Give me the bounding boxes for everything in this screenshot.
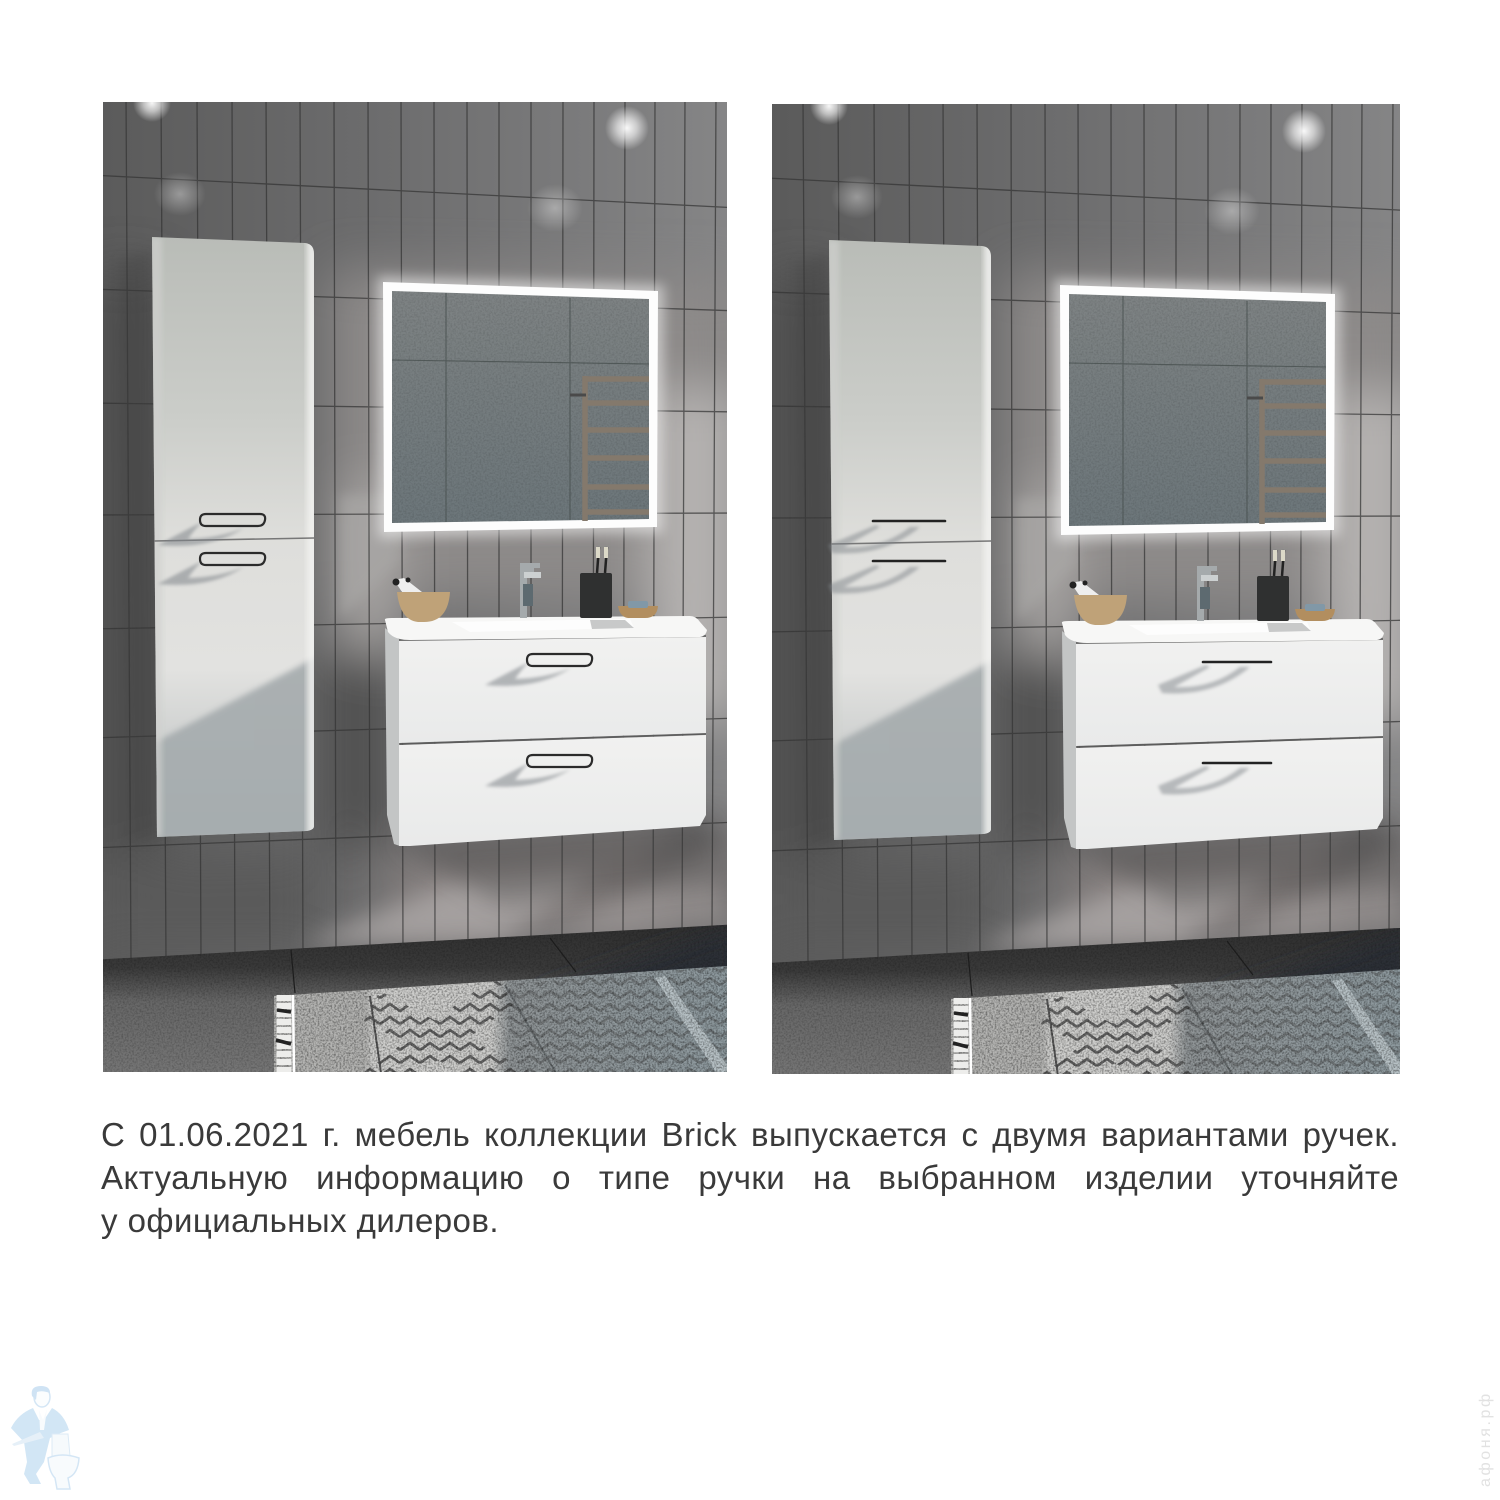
handle: cabinet upper bar [873, 520, 945, 522]
rug [274, 966, 740, 1085]
illuminated mirror [1054, 279, 1341, 541]
illuminated mirror [377, 276, 664, 538]
handle: cabinet lower loop [200, 553, 265, 565]
rug [951, 969, 1417, 1088]
handle: drawer lower loop [527, 755, 592, 767]
tiled wall [90, 84, 740, 1085]
panel: left photo, loop handles [90, 84, 740, 1085]
text block: note about handle variants: Актуальную информацию о типе ручки на выбранном изделии уточняйте [101, 1159, 1399, 1196]
handle: drawer lower bar [1203, 762, 1271, 764]
handle: cabinet lower bar [873, 560, 945, 562]
icon: plumber mascot with toilet [11, 1386, 79, 1489]
tall cabinet [797, 240, 997, 843]
tall cabinet [120, 237, 320, 840]
floor [90, 924, 740, 1080]
vanity unit with basin [1062, 619, 1407, 908]
watermark: site name: афоня.рф [1477, 1391, 1494, 1487]
tiled wall [767, 87, 1417, 1088]
text block: note about handle variants: С 01.06.2021 г. мебель коллекции Brick выпускается с двумя вариантами ручек. [101, 1116, 1399, 1153]
floor [767, 927, 1417, 1083]
text block: note about handle variants [101, 1116, 1399, 1239]
washbasin accessories and faucet [1070, 550, 1335, 625]
handle: cabinet upper loop [200, 514, 265, 526]
washbasin accessories and faucet [392, 547, 658, 622]
text block: note about handle variants: у официальных дилеров. [101, 1202, 499, 1239]
panel: right photo, bar handles [767, 87, 1417, 1088]
handle: drawer upper bar [1203, 661, 1271, 663]
vanity unit with basin [385, 616, 730, 905]
handle: drawer upper loop [527, 654, 592, 666]
